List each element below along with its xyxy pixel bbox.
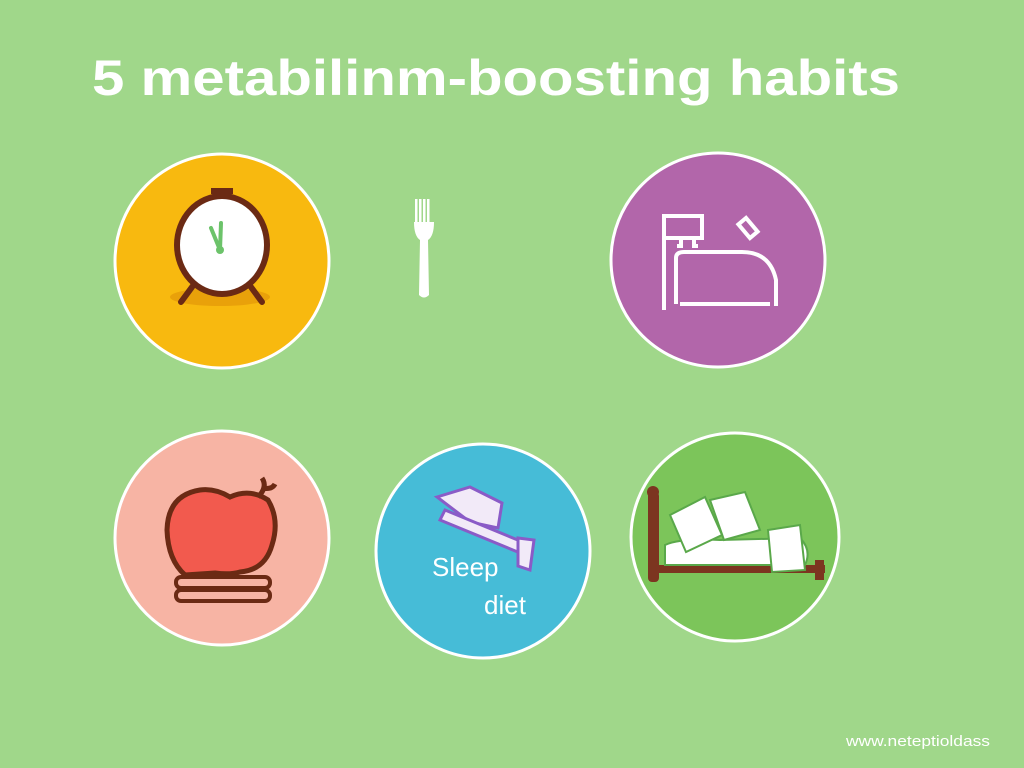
panel: sleep diet [376,444,590,658]
panel: apple [115,431,329,645]
panel: clock [115,154,329,368]
panel: purple desk [611,153,825,367]
panel: sleep diet: Sleep [432,552,498,582]
panel: bed [631,433,839,641]
footer url: www.neteptioldass [845,733,990,750]
panel: sleep diet: diet [484,590,527,620]
title: 5 metabilinm-boosting habits [92,50,900,106]
icon: fork [414,199,434,298]
